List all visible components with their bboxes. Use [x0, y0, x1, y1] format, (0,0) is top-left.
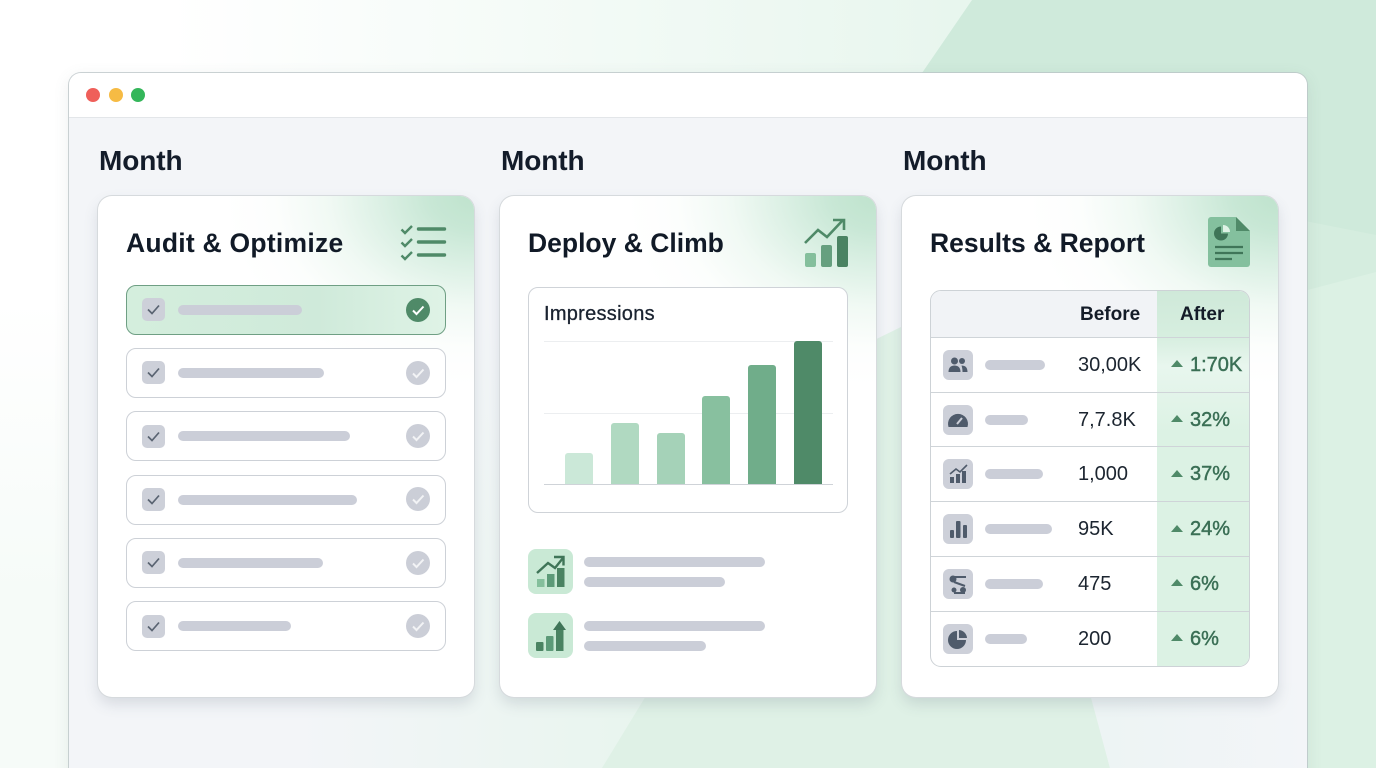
metric placeholder 4	[985, 524, 1052, 534]
text placeholder 1	[178, 305, 302, 315]
icon: growth chart	[804, 218, 848, 267]
bar 2	[611, 423, 639, 484]
before value 3: 1,000	[1078, 463, 1128, 485]
heading: deploy and climb: Deploy & Climb	[528, 228, 724, 258]
up marker 2	[1171, 415, 1183, 422]
up marker 1	[1171, 360, 1183, 367]
before value 1: 30,00K	[1078, 354, 1141, 376]
table header	[931, 291, 1157, 337]
metric placeholder 6	[985, 634, 1027, 644]
status check 5	[406, 551, 430, 575]
metric placeholder 3	[985, 469, 1043, 479]
status check 1	[406, 298, 430, 322]
heading: month 3: Month	[903, 145, 986, 176]
checklist row 1 (active)	[126, 285, 446, 335]
heading: month 2: Month	[501, 145, 584, 176]
icon: growth tile	[528, 549, 573, 594]
metric icon: line and bars	[943, 459, 973, 489]
icon: rising arrow tile	[528, 613, 573, 658]
bar chart: impressions	[528, 287, 848, 513]
text placeholder 4	[178, 495, 357, 505]
checkbox 3	[142, 425, 165, 448]
status check 4	[406, 487, 430, 511]
after value 5: 6%	[1190, 573, 1219, 595]
checklist row 3	[126, 411, 446, 461]
up marker 4	[1171, 525, 1183, 532]
metric icon: bars	[943, 514, 973, 544]
panel: deploy and climb	[496, 195, 880, 708]
up marker 6	[1171, 634, 1183, 641]
heading: results and report: Results & Report	[930, 228, 1145, 258]
after value 6: 6%	[1190, 628, 1219, 650]
up marker 5	[1171, 579, 1183, 586]
detail line 3	[584, 621, 765, 631]
heading: month 1: Month	[99, 145, 182, 176]
text placeholder 6	[178, 621, 291, 631]
metric icon: people	[943, 350, 973, 380]
checklist row 2	[126, 348, 446, 398]
metric icon: pie	[943, 624, 973, 654]
detail line 4	[584, 641, 706, 651]
after value 3: 37%	[1190, 463, 1230, 485]
before value 2: 7,7.8K	[1078, 409, 1136, 431]
panel: results and report	[898, 195, 1282, 708]
status check 6	[406, 614, 430, 638]
text placeholder 2	[178, 368, 324, 378]
status check 3	[406, 424, 430, 448]
metric icon: route	[943, 569, 973, 599]
bar 4	[702, 396, 730, 484]
heading: audit and optimize: Audit & Optimize	[126, 228, 343, 258]
before value 4: 95K	[1078, 518, 1114, 540]
text placeholder 5	[178, 558, 323, 568]
checkbox 6	[142, 615, 165, 638]
window control dots	[86, 88, 145, 102]
checklist row 4	[126, 475, 446, 525]
metric icon: gauge	[943, 405, 973, 435]
column label: before: Before	[1080, 304, 1140, 325]
icon: report document	[1208, 217, 1250, 267]
checklist row 5	[126, 538, 446, 588]
detail line 2	[584, 577, 725, 587]
checkbox 2	[142, 361, 165, 384]
panel: audit and optimize	[94, 195, 478, 708]
bar 5	[748, 365, 776, 484]
bar 6	[794, 341, 822, 484]
checkbox 1	[142, 298, 165, 321]
after column	[1157, 291, 1249, 666]
checkbox 5	[142, 551, 165, 574]
after value 1: 1:70K	[1190, 354, 1242, 376]
chart title: Impressions	[544, 303, 655, 325]
metric placeholder 2	[985, 415, 1028, 425]
detail line 1	[584, 557, 765, 567]
metric placeholder 5	[985, 579, 1043, 589]
after value 2: 32%	[1190, 409, 1230, 431]
metric placeholder 1	[985, 360, 1045, 370]
after value 4: 24%	[1190, 518, 1230, 540]
bar 3	[657, 433, 685, 484]
status check 2	[406, 361, 430, 385]
up marker 3	[1171, 470, 1183, 477]
before value 5: 475	[1078, 573, 1111, 595]
title bar	[69, 73, 1307, 118]
bar 1	[565, 453, 593, 484]
before value 6: 200	[1078, 628, 1111, 650]
checklist row 6	[126, 601, 446, 651]
checkbox 4	[142, 488, 165, 511]
icon: checklist	[400, 225, 446, 261]
text placeholder 3	[178, 431, 350, 441]
column label: after: After	[1180, 304, 1224, 325]
table: before and after	[930, 290, 1250, 667]
